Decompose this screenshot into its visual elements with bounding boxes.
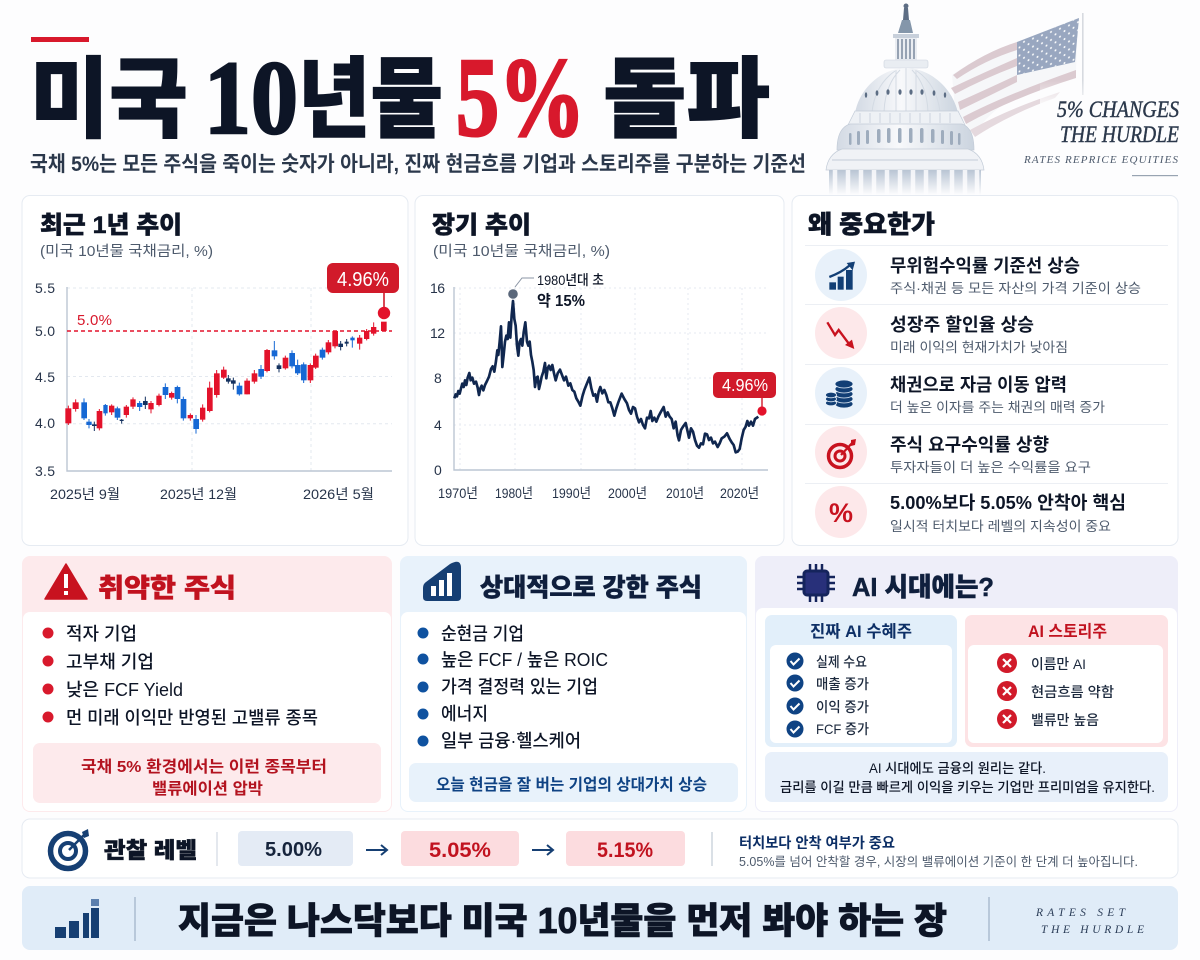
banner: conclusion bbox=[22, 886, 1178, 950]
level 5.05: 5.05% bbox=[429, 839, 491, 862]
callout: AI conclusion bbox=[765, 752, 1168, 802]
heading: strong stocks: 상대적으로 강한 주식 bbox=[480, 574, 702, 602]
vulnerable list: 적자 기업 bbox=[66, 624, 137, 644]
reason 2: 성장주 할인율 상승 bbox=[890, 315, 1034, 335]
panel: why it matters bbox=[792, 196, 1178, 546]
x axis labels bbox=[50, 486, 374, 502]
real AI beneficiaries: 진짜 AI 수혜주 bbox=[810, 622, 912, 641]
title: 미국 bbox=[30, 50, 188, 149]
header tagline: 5% CHANGES bbox=[1057, 97, 1179, 122]
vulnerable list: 먼 미래 이익만 반영된 고밸류 종목 bbox=[66, 708, 318, 728]
title bbox=[30, 36, 770, 160]
callout: current yield bbox=[327, 263, 399, 319]
reason 1: 무위험수익률 기준선 상승 bbox=[890, 256, 1080, 276]
callout: valuation pressure: 밸류에이션 압박 bbox=[152, 780, 263, 798]
reason 5 bbox=[890, 493, 1126, 534]
callout: AI conclusion: AI 시대에도 금융의 원리는 같다. bbox=[869, 761, 1046, 776]
level 5.00 bbox=[238, 831, 353, 866]
x axis labels: 2025년 12월 bbox=[160, 486, 237, 502]
icon: bars badge bbox=[423, 562, 461, 601]
y axis labels: 5.5 bbox=[35, 280, 55, 296]
vulnerable list bbox=[42, 624, 318, 728]
title: 5% bbox=[456, 36, 585, 160]
x axis labels: 2000년 bbox=[608, 485, 647, 501]
strong list: 가격 결정력 있는 기업 bbox=[441, 677, 598, 697]
peak annotation bbox=[508, 272, 604, 310]
callout: relative value: 오늘 현금을 잘 버는 기업의 상대가치 상승 bbox=[436, 776, 707, 794]
callout: current long term yield bbox=[713, 372, 776, 416]
illustration: US flag bbox=[951, 13, 1100, 137]
AI story stocks bbox=[965, 615, 1168, 747]
banner tagline bbox=[1035, 907, 1144, 936]
reason 5: 일시적 터치보다 레벨의 지속성이 중요 bbox=[890, 519, 1111, 534]
heading: watch levels: 관찰 레벨 bbox=[104, 838, 197, 863]
panel: long term chart bbox=[415, 196, 784, 546]
panel: watch levels bbox=[22, 819, 1178, 878]
y axis labels: 16 bbox=[430, 280, 445, 296]
real AI beneficiaries: 매출 증가 bbox=[816, 676, 869, 692]
panel: relatively strong stocks bbox=[400, 556, 747, 812]
note: settling matters: 터치보다 안착 여부가 중요 bbox=[739, 835, 895, 852]
icon: red target bbox=[815, 426, 867, 478]
reason 4: 주식 요구수익률 상향 bbox=[890, 435, 1049, 455]
vulnerable list: 낮은 FCF Yield bbox=[66, 680, 183, 700]
y axis labels bbox=[35, 280, 55, 479]
reason 2: 미래 이익의 현재가치가 낮아짐 bbox=[890, 340, 1068, 355]
y axis labels: 4.5 bbox=[35, 369, 55, 385]
reason 4: 투자자들이 더 높은 수익률을 요구 bbox=[890, 460, 1091, 475]
reason 1: 주식·채권 등 모든 자산의 가격 기준이 상승 bbox=[890, 281, 1141, 296]
heading: recent one year: 최근 1년 추이 bbox=[40, 212, 182, 239]
x axis labels bbox=[438, 485, 759, 501]
subtitle: 국채 5%는 모든 주식을 죽이는 숫자가 아니라, 진짜 현금흐름 기업과 스토리주를 구분하는 기준선 bbox=[30, 153, 806, 176]
y axis labels: 3.5 bbox=[35, 463, 55, 479]
real AI beneficiaries bbox=[765, 615, 957, 747]
header tagline: THE HURDLE bbox=[1060, 122, 1179, 147]
banner tagline: RATES SET bbox=[1035, 907, 1127, 919]
callout: AI conclusion: 금리를 이길 만큼 빠르게 이익을 키우는 기업만 프리미엄을 유지한다. bbox=[780, 780, 1155, 795]
icon: percent bbox=[815, 486, 867, 538]
callout: current long term yield: 4.96% bbox=[722, 375, 768, 395]
5 percent threshold line bbox=[67, 330, 392, 332]
strong list: 순현금 기업 bbox=[441, 624, 524, 644]
icon: banner bars bbox=[55, 899, 99, 938]
strong list: 높은 FCF / 높은 ROIC bbox=[441, 650, 608, 670]
reason 4 bbox=[890, 435, 1091, 475]
icon: warning triangle bbox=[45, 564, 87, 599]
real AI beneficiaries: 이익 증가 bbox=[816, 699, 869, 715]
strong list: 에너지 bbox=[441, 704, 488, 724]
callout: valuation pressure: 국채 5% 환경에서는 이런 종목부터 bbox=[81, 758, 327, 776]
heading: why it matters: 왜 중요한가 bbox=[808, 211, 935, 239]
reason 1 bbox=[890, 256, 1141, 296]
banner tagline: THE HURDLE bbox=[1041, 924, 1144, 936]
icon: chip bbox=[797, 564, 835, 602]
x axis labels: 1970년 bbox=[438, 485, 478, 501]
real AI beneficiaries: 실제 수요 bbox=[816, 654, 867, 670]
icon: percent: % bbox=[829, 498, 853, 528]
panel: vulnerable stocks bbox=[22, 556, 392, 812]
heading: long term: 장기 추이 bbox=[432, 212, 531, 239]
y axis labels: 8 bbox=[434, 370, 442, 386]
vulnerable list: 고부채 기업 bbox=[66, 652, 154, 672]
x axis labels: 2010년 bbox=[666, 485, 704, 501]
x axis labels: 2020년 bbox=[720, 485, 759, 501]
x axis labels: 2025년 9월 bbox=[50, 486, 120, 502]
icon: coin stacks bbox=[815, 367, 867, 419]
accent bar bbox=[31, 37, 89, 42]
callout: valuation pressure bbox=[33, 743, 381, 803]
title: 년물 bbox=[298, 50, 443, 149]
x axis labels: 1990년 bbox=[552, 485, 591, 501]
arrow bbox=[366, 845, 387, 855]
callout: relative value bbox=[409, 763, 738, 802]
AI story stocks: 밸류만 높음 bbox=[1031, 712, 1099, 728]
note: settling matters bbox=[739, 835, 1138, 869]
header tagline: RATES REPRICE EQUITIES bbox=[1023, 154, 1178, 166]
heading: vulnerable stocks: 취약한 주식 bbox=[98, 573, 236, 603]
callout: current yield: 4.96% bbox=[337, 269, 389, 291]
reason 3 bbox=[890, 375, 1105, 415]
level 5.00: 5.00% bbox=[265, 839, 322, 861]
note: settling matters: 5.05%를 넘어 안착할 경우, 시장의 밸류에이션 기준이 한 단계 더 높아집니다. bbox=[739, 855, 1138, 869]
level 5.15 bbox=[566, 831, 685, 866]
candlestick chart bbox=[65, 322, 387, 434]
panel: AI era bbox=[755, 556, 1178, 812]
reason 3: 더 높은 이자를 주는 채권의 매력 증가 bbox=[890, 400, 1105, 415]
heading: AI era: AI 시대에는? bbox=[852, 572, 994, 602]
y axis labels: 5.0 bbox=[35, 323, 55, 339]
long term yield line bbox=[454, 301, 758, 452]
y axis labels bbox=[430, 280, 445, 478]
icon: rising bars bbox=[815, 249, 867, 301]
illustration: Capitol dome bbox=[820, 4, 995, 195]
reason 5: 5.00%보다 5.05% 안착아 핵심 bbox=[890, 493, 1126, 513]
subheading: recent chart unit: (미국 10년물 국채금리, %) bbox=[40, 243, 213, 260]
title: 10 bbox=[204, 39, 298, 156]
x axis labels: 1980년 bbox=[495, 485, 533, 501]
level 5.15: 5.15% bbox=[597, 839, 653, 862]
level 5.05 bbox=[401, 831, 519, 866]
title: 돌파 bbox=[603, 50, 770, 149]
AI story stocks: 현금흐름 약함 bbox=[1031, 684, 1114, 700]
reason 2 bbox=[890, 315, 1068, 355]
real AI beneficiaries: FCF 증가 bbox=[816, 721, 869, 737]
header tagline bbox=[1023, 97, 1179, 176]
y axis labels: 4.0 bbox=[35, 415, 55, 431]
strong list bbox=[418, 624, 608, 751]
peak annotation: 1980년대 초 bbox=[537, 272, 604, 288]
reason 3: 채권으로 자금 이동 압력 bbox=[890, 375, 1067, 395]
icon: falling arrow bbox=[815, 307, 867, 359]
panel: recent one year chart bbox=[22, 196, 408, 546]
threshold label: 5.0% bbox=[77, 312, 112, 329]
banner text: 지금은 나스닥보다 미국 10년물을 먼저 봐야 하는 장 bbox=[178, 900, 947, 941]
y axis labels: 4 bbox=[434, 417, 442, 433]
icon: navy target bbox=[50, 829, 89, 868]
y axis labels: 0 bbox=[434, 462, 442, 478]
subheading: long term unit: (미국 10년물 국채금리, %) bbox=[433, 243, 610, 260]
strong list: 일부 금융·헬스케어 bbox=[441, 731, 581, 751]
y axis labels: 12 bbox=[430, 325, 445, 341]
AI story stocks: AI 스토리주 bbox=[1028, 622, 1107, 641]
peak annotation: 약 15% bbox=[537, 292, 585, 310]
x axis labels: 2026년 5월 bbox=[303, 486, 374, 502]
AI story stocks: 이름만 AI bbox=[1031, 656, 1086, 672]
arrow bbox=[532, 845, 553, 855]
